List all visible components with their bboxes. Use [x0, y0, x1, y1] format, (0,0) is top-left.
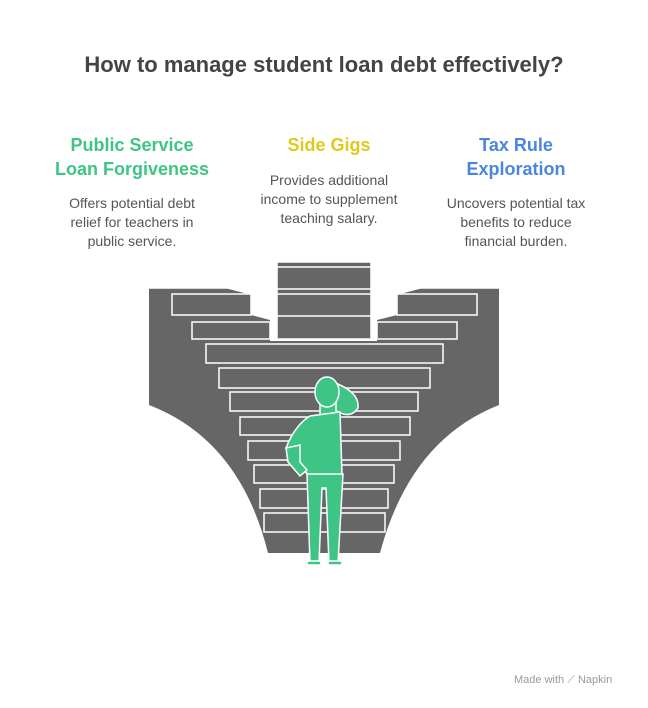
- heading: tax rule: Tax Rule: [479, 135, 553, 155]
- person: [286, 377, 358, 565]
- title: How to manage student loan debt effectively?: [84, 52, 564, 77]
- heading: public service: [55, 135, 209, 179]
- text: side gigs: [261, 172, 398, 226]
- heading: side gigs: Side Gigs: [287, 135, 371, 155]
- text: tax rule: Uncovers potential tax: [447, 195, 585, 211]
- heading: tax rule: [466, 135, 566, 179]
- heading: tax rule: Exploration: [466, 159, 566, 179]
- text: public service: public service.: [88, 233, 176, 249]
- footer: made with napkin: Made with ⟋ Napkin: [514, 674, 612, 686]
- text: side gigs: teaching salary.: [280, 210, 378, 226]
- text: tax rule: benefits to reduce: [460, 214, 572, 230]
- heading: public service: Loan Forgiveness: [55, 159, 209, 179]
- heading: public service: Public Service: [70, 135, 194, 155]
- text: tax rule: [447, 195, 585, 249]
- text: public service: relief for teachers in: [71, 214, 193, 230]
- text: side gigs: Provides additional: [270, 172, 388, 188]
- text: public service: [69, 195, 195, 249]
- text: tax rule: financial burden.: [465, 233, 567, 249]
- text: side gigs: income to supplement: [261, 191, 397, 207]
- text: public service: Offers potential debt: [69, 195, 195, 211]
